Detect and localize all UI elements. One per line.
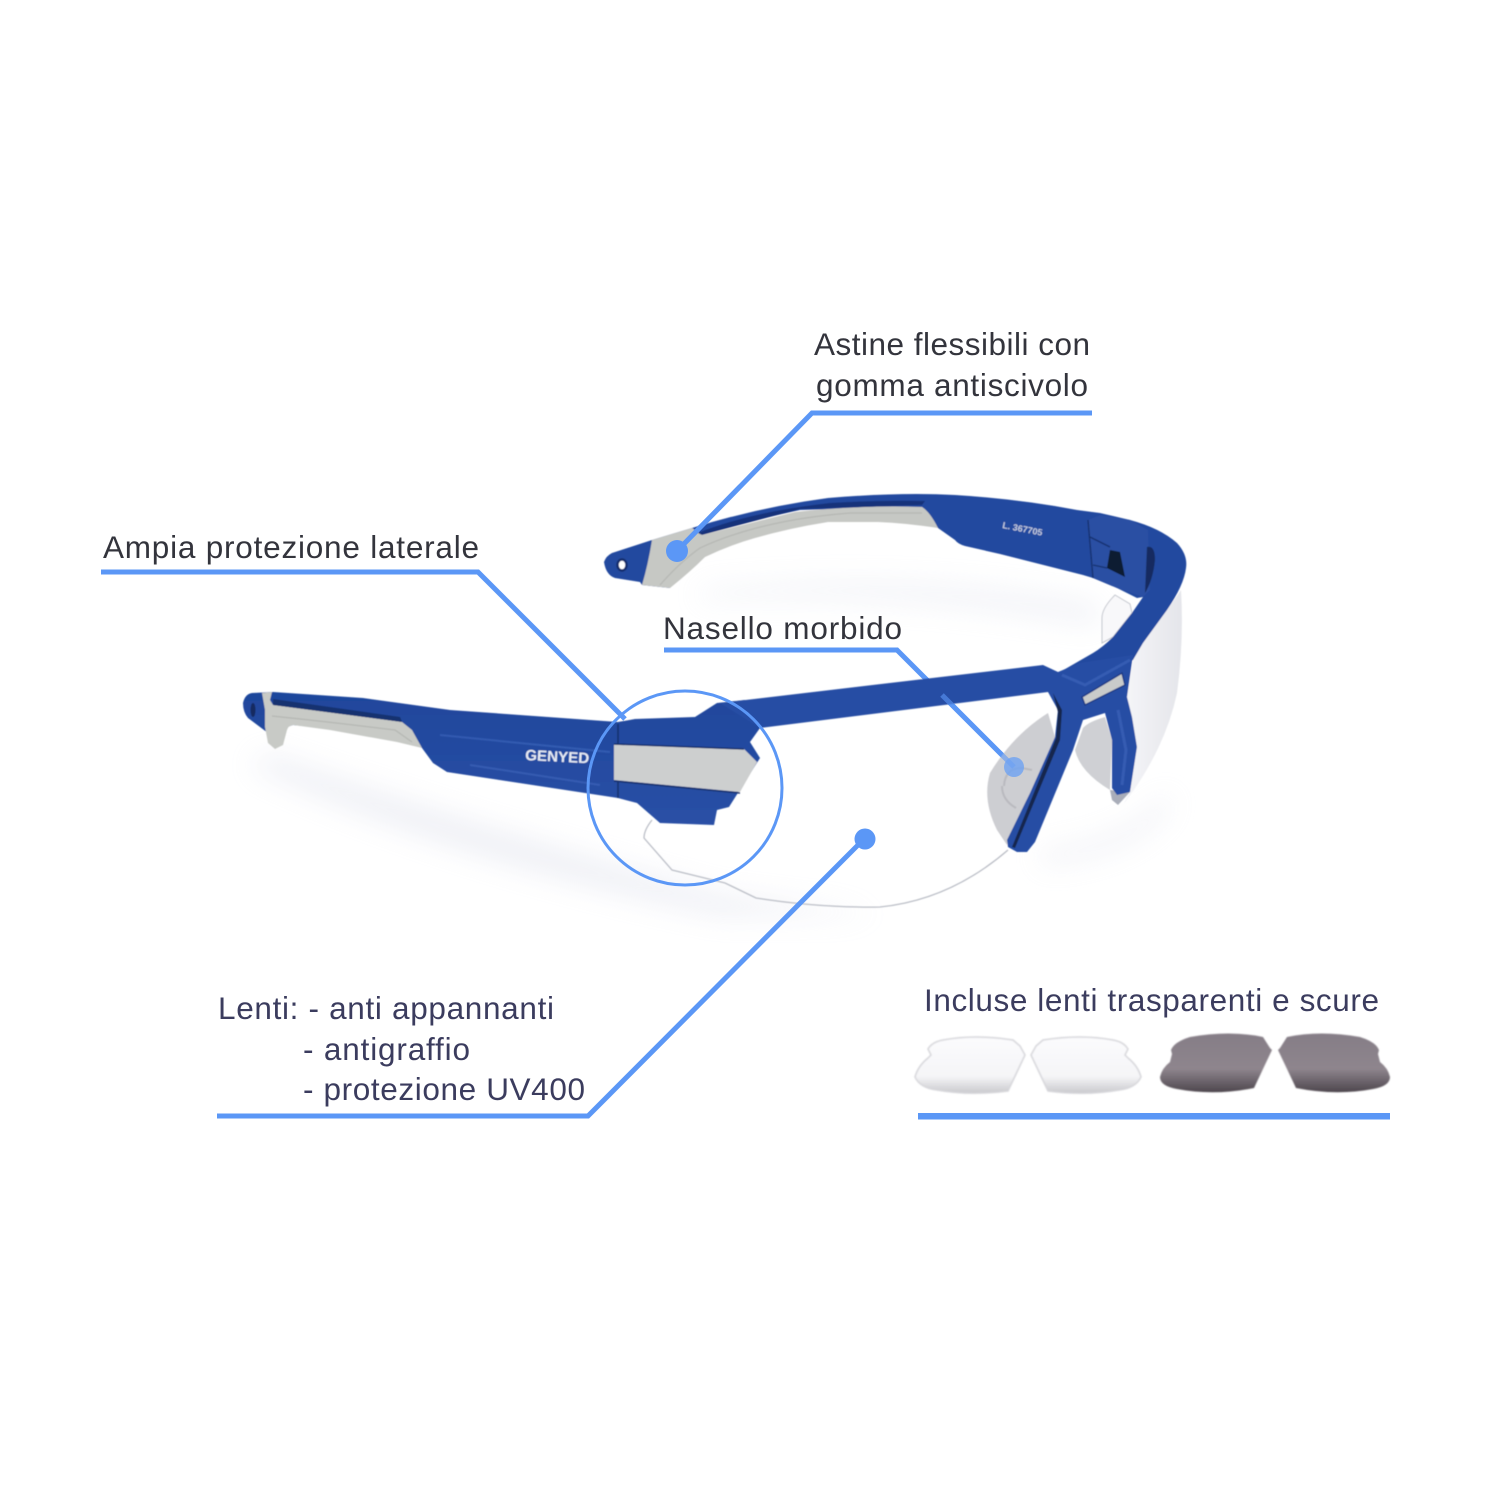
hinge inner slit: [1145, 547, 1155, 593]
callout line: nasello morbido: [664, 650, 1014, 767]
model number: L. 367705: [1002, 520, 1043, 538]
text: lenti: Lenti: - anti appannanti: [218, 990, 554, 1026]
highlight on arm: [1062, 660, 1130, 785]
text: astine flessibili: [814, 326, 1090, 403]
main frame bar: [720, 655, 1137, 852]
back temple and upper arm: [604, 494, 1186, 682]
grip on front temple: [262, 692, 422, 749]
callout line: ampia protezione laterale: [101, 572, 625, 719]
hinge slot: [1107, 550, 1125, 577]
text: nasello morbido: Nasello morbido: [663, 610, 902, 646]
dark strip on back temple: [698, 501, 925, 535]
lens edge: [644, 820, 1008, 907]
clear lens left: [915, 1037, 1025, 1093]
text: lenti: - antigraffio: [303, 1031, 470, 1067]
tip of right arm: [1110, 790, 1130, 805]
text: lenti: [218, 990, 585, 1107]
clear replacement lenses: [915, 1037, 1141, 1093]
callout circle: side protection: [588, 691, 782, 885]
eyelet on front temple: [250, 703, 256, 717]
text: ampia protezione laterale: Ampia protezione laterale: [103, 529, 479, 565]
text: astine flessibili: gomma antiscivolo: [816, 367, 1088, 403]
grip detail line: [660, 513, 922, 585]
grip detail line: [272, 716, 412, 742]
bridge gray insert: [1082, 673, 1125, 705]
eyelet hole: [618, 560, 626, 570]
callout line: astine: [677, 413, 1092, 551]
text: lenti: - protezione UV400: [303, 1071, 585, 1107]
logo: GENYED: [525, 747, 590, 767]
dark slit on front temple: [273, 699, 402, 722]
nose pad: left: [987, 713, 1055, 845]
clear lens right: [1031, 1037, 1141, 1093]
hinge block: [1088, 515, 1150, 597]
front temple: [243, 692, 760, 825]
temple highlight: [440, 735, 610, 785]
dark lens left: [1160, 1034, 1272, 1092]
translucent callout segment on lens: [942, 695, 1014, 767]
hinge seams: [1088, 520, 1110, 578]
nose pad detail: [1002, 768, 1032, 808]
lens: right side: [1123, 590, 1182, 805]
shadow under glasses: [250, 583, 1170, 915]
callout dot: nose pad: [1004, 757, 1024, 777]
nose pad: right: [1075, 717, 1112, 790]
callout dot: astine: [666, 540, 688, 562]
callout line: lenti: [217, 838, 865, 1116]
side protector gray panel: [614, 744, 757, 792]
callout dot: lenti: [854, 828, 876, 850]
rail slit: [1012, 693, 1062, 848]
text: astine flessibili: Astine flessibili con: [814, 326, 1090, 362]
back grip: [642, 507, 938, 588]
seams around panel: [614, 724, 744, 798]
dark replacement lenses: [1160, 1034, 1390, 1092]
text: incluse lenti: Incluse lenti trasparenti e scure: [924, 982, 1379, 1018]
dark lens right: [1278, 1034, 1390, 1092]
underline: lenses: [918, 1113, 1390, 1120]
glasses: [243, 494, 1186, 907]
lens: rear upper sliver: [1102, 595, 1132, 643]
